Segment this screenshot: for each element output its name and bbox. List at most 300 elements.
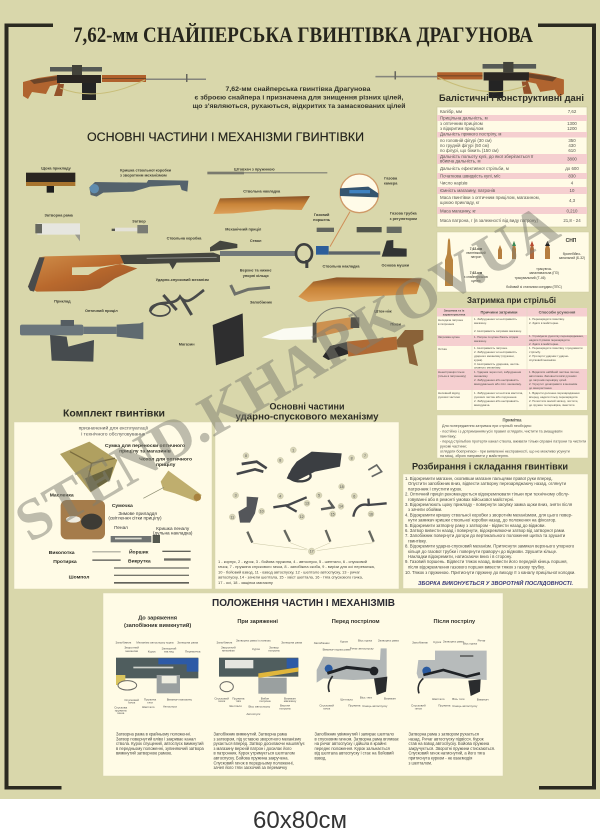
cartridge labels: 7,62-мм <box>470 271 483 275</box>
kit labels: і технічного обслуговування <box>81 431 146 437</box>
delay table text: 2. Усунути і дозаправити в механізм <box>529 382 577 386</box>
diagram labels: гачок <box>415 706 423 710</box>
steps text: говуванні або в ремонті умовах військової майстерні. <box>408 497 514 502</box>
delay table text: 2. Забруднення або несправність <box>474 399 519 403</box>
intro text: 7,62-мм снайперська гвинтівка Драгунова <box>226 85 371 93</box>
kit labels <box>49 424 193 580</box>
rifle illustration: right <box>375 62 564 98</box>
delay table text: 2. Забруднення або несправність <box>474 378 519 382</box>
delay table text: 1. Несправність патрона. <box>474 346 508 350</box>
kit labels: прицілу та магазинів <box>119 448 171 454</box>
part: optical sight <box>20 320 143 362</box>
steps text: 1. Відокремити магазин, охопивши магазин пальцями правої руки вперед. <box>405 476 553 481</box>
diagram labels: Спусковий <box>214 696 229 700</box>
item: pencil case <box>111 535 160 543</box>
table rows: Маса магазину, кг <box>440 208 476 214</box>
description: during loading: рухається вперед. Затвор досилаючи нашляпує <box>214 741 305 746</box>
kit labels: Пенал <box>114 525 128 530</box>
part labels: Ствол <box>250 239 262 243</box>
part numbers: 18 <box>340 485 344 489</box>
cartridge labels: кулею <box>471 279 481 283</box>
diagram labels: гачок <box>323 706 331 710</box>
part: self-timer <box>273 497 307 512</box>
cartridge labels: запалювальна (ПЗ) <box>529 271 559 275</box>
delay table text: автотяжка. Заповнити віскі рухомих <box>529 374 577 378</box>
table rows: по грудній фігурі (50 см) <box>440 143 489 148</box>
cartridge labels: з снайперською <box>464 275 489 279</box>
steps text: 7. Запобіжник повернути догори до вертикального положення щитка та зрушити <box>405 533 566 538</box>
column headings: Перед пострілом <box>332 619 380 625</box>
cartridge labels: трасувальний (Т-46) <box>514 276 546 280</box>
part labels: з регулятором <box>390 217 417 221</box>
cartridge labels: запальний (Б-32) <box>559 256 585 260</box>
kit labels: Викрутка <box>128 559 151 565</box>
diagram labels: Спускова <box>114 706 127 710</box>
delay table text: надати її різким перезарядити. <box>529 338 570 342</box>
heading: main parts: ОСНОВНІ ЧАСТИНИ І МЕХАНІЗМИ ГВИНТІВКИ <box>87 130 364 144</box>
parts legend: автоспуску, 14 - зачепи шептала, 15 - хвіст шептала, 16 - тяга спускового гачка, <box>218 575 363 580</box>
steps text: нути замикач кришки ствольної коробки назад, до положення на фіксатор. <box>408 518 556 523</box>
diagram labels: тяги <box>147 700 153 704</box>
delay table text: 1. Видалити набійний частіше пилом, <box>529 370 580 374</box>
delay table text: магазину. <box>474 339 487 343</box>
part: axles <box>247 530 374 543</box>
diagram labels: Вимикач <box>477 698 489 702</box>
kit labels: прицілу <box>156 462 176 468</box>
part numbers: 16 <box>369 512 373 516</box>
diagram labels: Спусковий <box>124 698 139 702</box>
delay table text: 2. Протерти ударник і ударно- <box>529 354 569 358</box>
kit labels: (світлення сітки прицілу) <box>108 515 162 520</box>
part labels: Піхви <box>390 322 402 326</box>
delay table text: викидувальних або післ. механізму. <box>474 382 522 386</box>
table rows: до 600 <box>565 166 579 171</box>
diagram labels: Затворний <box>162 646 177 650</box>
table rows: Прицільна дальність, м <box>440 116 488 120</box>
part labels: Ствольна накладка <box>323 264 360 268</box>
description: during loading: в патронник. Курок утримується шепталом <box>214 751 295 756</box>
steps text: 10. Тяжок з пружиною. Притиснути пружину до виходу її з каналу прицільної колодки. <box>405 570 575 575</box>
diagram labels: Пружина <box>348 704 361 708</box>
delay table text: 1. Утримуючи рукоятку перезаряджання, <box>529 334 584 338</box>
diagram labels: Запобіжник <box>314 641 330 645</box>
part: hammer <box>238 497 258 523</box>
delay table text <box>438 308 584 407</box>
diagram labels: Верхня <box>280 704 290 708</box>
description: before shot: Запобіжник увімкнутий і запирає шептало <box>314 732 395 736</box>
delay table text: Способи усунення <box>539 310 576 314</box>
part: trigger <box>353 499 387 517</box>
diagram labels: Вісь автоспуску <box>249 704 271 708</box>
steps text: 4. Відокремити кришку ствольної коробки з зворотнім механізмом, для цього повер- <box>405 512 573 517</box>
diagram labels: Затворна рама <box>378 639 399 643</box>
item: pouch <box>60 442 117 492</box>
note text: гвинтівку; <box>440 434 456 438</box>
diagram labels: Пружина <box>232 696 245 700</box>
diagram labels: Курок <box>148 650 156 654</box>
description: before shot: взвод. <box>314 756 326 760</box>
part labels: Основа мушки <box>382 264 410 268</box>
description: before loading: Затворна рама в крайньому положенні. <box>116 732 191 736</box>
panel: firing delay table <box>437 308 587 410</box>
diagram labels: механізм <box>125 649 138 653</box>
part: spring <box>368 465 382 477</box>
table rows: Початкова швидкість кулі, м/с <box>440 174 501 178</box>
delay table text: 2. Забруднення чи несправність <box>474 350 517 354</box>
kit labels: Сумочка <box>112 503 133 509</box>
delay table text: магазину. <box>474 321 487 325</box>
parts legend: 17 - осі, 18 - защіпка магазину <box>218 580 273 585</box>
part labels: Газова <box>384 176 398 180</box>
description: before shot: від шептала автоспуску і стає на бойовий <box>314 751 394 756</box>
part labels: Газовий <box>314 213 330 217</box>
part labels: Ствольна накладка <box>243 190 281 194</box>
diagram labels: Вісь курка <box>463 641 477 645</box>
table rows: Маса гвинтівки з оптичним прицілом, магазином, <box>440 195 540 200</box>
part: lower handguard <box>298 277 422 302</box>
description: after shot: закручується. Зворотні пружини стискаються. <box>408 746 495 751</box>
column headings: До заряження <box>138 615 177 621</box>
steps text: з зачепи обойми. <box>408 507 442 512</box>
steps text: 9. Газовий поршень. Відвести тяжок назад, вивести його передній кінець поршня, <box>405 559 568 564</box>
table rows: Ємність магазину, патронів <box>440 188 496 193</box>
steps text: 8. Відокремити ударно-спусковий механізм. Притиснути замикач верхнього упорного <box>405 544 575 549</box>
table rows <box>440 109 581 223</box>
delay table text: 1. Забруднення чи нестача мастила, <box>474 391 523 395</box>
delay table text: Неповний відхід <box>438 391 460 395</box>
note text: Для попередження затримок при стрільбі необхідно: <box>442 424 532 428</box>
description: before shot: переднє положення. Курок зальнається <box>314 746 390 751</box>
delay table text: рухомих частин або порушення. <box>474 395 517 399</box>
diagram labels: Ричаг <box>478 639 486 643</box>
part labels: Штовхач з пружиною <box>234 167 275 171</box>
kit labels: Йоршик <box>129 547 149 555</box>
part numbers: 5 <box>318 494 320 498</box>
delay table text: до використання. <box>529 386 552 390</box>
delay table text: 1. Патрон із кулею біжить слідом <box>474 335 518 339</box>
description: before shot <box>314 732 399 760</box>
note text: на місці, зброю направити у майстерню. <box>440 454 509 458</box>
column headings: (запобіжник вимкнутий) <box>124 622 191 629</box>
table rows: 610 <box>568 148 576 153</box>
diagram labels: Затвор <box>269 646 279 650</box>
part: scabbard <box>323 330 423 366</box>
diagram labels: патрона <box>279 706 291 710</box>
part labels: Ударно-спусковий механізм <box>156 278 209 282</box>
table rows: по головній фігурі (30 см) <box>440 138 492 143</box>
steps text: 5. Відокремити затворну раму з затвором - відвести назад до відмови. <box>405 523 546 528</box>
steps text: після відокремлення газового поршня вивести тяжок з газову трубку. <box>408 564 545 569</box>
part numbers: 13 <box>305 502 309 506</box>
diagram labels: Вибач <box>261 696 270 700</box>
diagram labels: Запобіжник <box>115 640 132 644</box>
part numbers: 8 <box>245 454 247 458</box>
table rows: 4,3 <box>569 198 576 203</box>
steps text: гвинтівку. <box>408 538 427 543</box>
delay table text: характеристика <box>443 312 466 316</box>
description: after shot: став на взвод автоспуску. Бойова пружина <box>408 741 490 746</box>
parts legend: 10 - бойовий взвод, 11 - взвод автоспуску, 12 - шептало автоспуску, 13 - ричаг <box>218 569 361 574</box>
part: safety bracket <box>237 462 267 474</box>
delay table text: стрільбу. <box>529 350 541 354</box>
delay table text: 2. Почистити малий затвор, чистити, <box>529 399 578 403</box>
delay table text: до патронів перевірку цілей. <box>529 378 567 382</box>
part: magazine <box>213 313 244 365</box>
diagram labels: гачок <box>128 701 136 705</box>
table rows: 1200 <box>567 126 577 131</box>
delay table text: викидувача. <box>474 403 490 407</box>
part: cheek piece <box>26 173 75 193</box>
diagram labels: Автоспуск <box>163 704 178 708</box>
intro text: що з'являються, рухаються, відкритих та замаскованих цілей <box>192 102 406 110</box>
diagram labels: Спусковий <box>319 704 334 708</box>
diagram labels: Шептало <box>229 704 242 708</box>
description: during loading: зачеп його тяги заскочив за перемичку <box>214 765 288 770</box>
part labels: Магазин <box>179 343 195 347</box>
diagram labels: Кінець автоспуску <box>363 704 388 708</box>
diagram labels: Шептало <box>142 705 155 709</box>
delay table text: курка). <box>474 358 483 362</box>
part numbers: 4 <box>279 494 281 498</box>
diagram labels: Вимикач магазину <box>167 697 192 701</box>
heading: positions: ПОЛОЖЕННЯ ЧАСТИН І МЕХАНІЗМІВ <box>212 598 395 609</box>
steps text: 2. Оптичний приціл рекомендується відокремлювати тільки при технічному обслу- <box>405 492 570 497</box>
panel: disassembly steps <box>403 474 588 588</box>
delay table text: сновного механізму. <box>474 366 501 370</box>
delay table text: 1. Вдарити долонею перезаряджання <box>529 391 580 395</box>
parts legend <box>218 559 375 585</box>
part numbers: 17 <box>310 550 314 554</box>
part numbers: 11 <box>230 515 234 519</box>
part: receiver cover <box>89 180 188 197</box>
part numbers <box>229 447 374 555</box>
table rows: Число нарізів <box>440 180 468 186</box>
part numbers: 6 <box>353 494 355 498</box>
note text <box>440 418 586 458</box>
description: before shot: на ричаг автоспуску і дійшла в крайнє <box>314 741 387 746</box>
steps text: Опустити запобіжник вниз, відвести затворну перезаряджаючу назад, оглянути <box>408 481 567 486</box>
table rows: 4 <box>571 180 574 186</box>
part: sear <box>321 500 334 509</box>
part labels: Ствольна коробка <box>167 236 202 240</box>
diagram labels: Курок <box>340 640 349 644</box>
table rows: 1300 <box>567 121 577 126</box>
kit labels: Зимове приладдя <box>118 511 157 516</box>
heading: disassembly: Розбирання і складання гвинтівки <box>412 462 568 472</box>
diagram labels: Вісь тяги <box>452 697 465 701</box>
cartridge labels: 7,62-мм <box>470 247 483 251</box>
table rows: по фігурі, що біжить (150 см) <box>440 148 499 153</box>
table rows: 350 <box>568 138 576 143</box>
steps text <box>405 476 575 575</box>
cartridge types <box>498 241 550 259</box>
part labels: Запобіжник <box>250 301 272 305</box>
intro text <box>192 85 406 110</box>
part: gas piston <box>317 228 334 232</box>
panel: ballistic data table <box>437 107 587 227</box>
diagram: before shot <box>317 648 387 695</box>
kit labels: Шомпол <box>69 574 89 580</box>
part: piston rod <box>207 172 327 174</box>
part numbers: 1 <box>292 448 294 452</box>
delay table text: Осічка <box>438 347 447 351</box>
diagram labels: Вісь тяги <box>360 696 372 700</box>
part numbers: 15 <box>331 512 335 516</box>
delay table text: 2. Здати в майстерню. <box>529 342 559 346</box>
delay table text: 3. Несправність ударника, шепта- <box>474 362 519 366</box>
panel: main parts diagram <box>20 166 423 366</box>
note text: Примітка <box>503 418 522 422</box>
panel: positions of parts and mechanisms <box>103 593 503 776</box>
part numbers: 3 <box>235 494 237 498</box>
title: 7,62-мм СНАЙПЕРСЬКА ГВИНТІВКА ДРАГУНОВА <box>73 22 533 47</box>
table rows: 10 <box>570 188 575 193</box>
table rows: з відкритим прицілом <box>440 126 483 131</box>
table rows: вбивча дальність, м <box>440 158 481 164</box>
part: gas chamber magnifier <box>330 174 379 247</box>
steps text: 6. Затвор вивести назад і повернути, відокремлюючи затвор від затворної рами. <box>405 528 565 533</box>
part: assembled rifle <box>28 240 407 292</box>
delay table text: ударного механізму (пружини, <box>474 354 515 358</box>
description: before loading <box>116 732 204 756</box>
diagram labels: Шептало <box>432 697 445 701</box>
panel: note <box>437 415 588 458</box>
note text: - перед стрільбою протерти канал ствола, вживати тільки справні патрони та чистити <box>440 440 586 444</box>
part labels: Оптичний приціл <box>85 309 118 313</box>
part labels: камера <box>384 182 398 186</box>
description: after shot <box>408 732 495 765</box>
part labels: Газова трубка <box>390 212 418 216</box>
heading: trigger mechanism parts: Основні частини <box>269 402 345 412</box>
diagram labels: гачка <box>117 711 125 715</box>
description: after shot: з шепталом. <box>408 760 432 765</box>
part labels: Приклад <box>54 300 71 304</box>
diagram labels: Запобіжник <box>412 640 429 644</box>
heading: trigger mechanism parts: ударно-спускового механізму <box>236 412 378 422</box>
panel: cartridges <box>437 232 589 292</box>
diagram labels: Пружина <box>144 698 156 702</box>
steps text: 3. Відокремлюють щоку прикладу - повернути засувку замка щоки вниз, зняти після <box>405 502 573 507</box>
part: gas tube <box>357 227 402 233</box>
table rows: щокою прикладу, кг <box>440 200 480 205</box>
part labels: Щока прикладу <box>41 166 72 170</box>
diagram labels: Курок <box>252 647 261 651</box>
diagram labels: Кінець автоспуску <box>453 704 478 708</box>
delay table text: вперед, надати гільзу перезарядити. <box>529 395 578 399</box>
kit labels: Виколотка <box>49 550 75 556</box>
part labels: Затворна рама <box>45 214 74 218</box>
part labels: Верхнє та нижнє <box>240 268 272 272</box>
part numbers: 12 <box>300 515 304 519</box>
diagram labels: Пружина <box>438 704 451 708</box>
kit labels: (дульна накладка) <box>153 531 193 536</box>
note text: рухомі частини; <box>440 444 467 448</box>
panel: trigger mechanism parts <box>215 422 399 589</box>
diagram labels: Затворна рама <box>281 641 302 645</box>
part labels: поршень <box>313 218 331 222</box>
delay table text: Причини затримки <box>480 310 518 314</box>
diagram labels: Затворна рама <box>443 640 464 644</box>
diagram labels: Автоспуск <box>246 712 261 716</box>
description: before loading: в передньому положенні, зупиняючий затвора <box>116 746 204 751</box>
delay table text: 1. Перезарядити гвинтівку. <box>529 317 565 321</box>
part numbers: 8 <box>279 459 281 463</box>
description: during loading: Спусковий гачок в передньому положенні, <box>214 760 294 765</box>
diagram labels: Вимикач <box>384 696 396 700</box>
delay table text: 2. Несправність затримки магазину. <box>474 329 522 333</box>
diagram labels: Зворотний <box>124 646 139 650</box>
cartridge labels: трасуюча- <box>536 267 552 271</box>
description: before loading: вимкнутий затворною рамою. <box>116 751 172 756</box>
diagram: after shot <box>417 651 487 696</box>
steps text: патронник і спустити курок. <box>408 486 462 491</box>
diagram labels: Вимикач <box>284 696 296 700</box>
column headings <box>124 615 476 629</box>
diagram labels: механізм <box>222 649 235 653</box>
rifle illustration: left <box>23 65 206 100</box>
part numbers: 14 <box>339 505 343 509</box>
cartridge labels: бронебійно- <box>563 252 581 256</box>
table rows: Маса патрона, г (в залежності від виду патрону) <box>440 218 538 223</box>
part labels: Механічний приціл <box>225 228 262 232</box>
table rows: 21,8 - 24 <box>563 218 581 223</box>
panel: rifle kit <box>14 422 212 589</box>
heading: firing delays: Затримка при стрільбі <box>467 295 556 305</box>
part: trigger mechanism <box>150 290 204 316</box>
diagram: during loading <box>219 658 298 694</box>
diagram labels <box>114 638 489 716</box>
diagram labels: пружина <box>115 708 127 712</box>
diagram labels: Перемичка <box>185 650 201 654</box>
cartridge labels: патрон <box>471 255 481 259</box>
kit labels: Чохол для оптичного <box>139 457 192 463</box>
column headings: Після пострілу <box>434 619 476 625</box>
heading: kit: Комплект гвинтівки <box>63 408 165 420</box>
delay table text: Затримка кулею <box>438 335 461 339</box>
description: during loading <box>214 732 305 770</box>
table rows: 7,62 <box>568 109 577 114</box>
heading: trigger mechanism parts <box>236 402 378 422</box>
diagram labels: магазину <box>284 699 297 703</box>
diagram labels: Ричаг автоспуску <box>350 646 374 650</box>
part labels: з зворотним механізмом <box>120 173 167 177</box>
large cartridge <box>445 238 453 286</box>
delay table text: 2. Здати в майстерню. <box>529 321 559 325</box>
delay table text: Неподача патрона <box>438 318 463 322</box>
kit labels: Протирка <box>53 559 77 565</box>
diagram labels: Спусковий <box>411 704 426 708</box>
diagram labels: патрона <box>268 649 280 653</box>
diagram labels: Шептало <box>340 697 353 701</box>
table rows: Дальність ефективної стрільби, м <box>440 166 509 171</box>
table rows: Калібр, мм <box>440 109 462 114</box>
delay table text: в патронник <box>438 322 455 326</box>
diagram labels: гачок <box>218 699 226 703</box>
description: before loading: Затвор повернутий вліво і закриває канал <box>116 736 196 741</box>
part labels: Шток-ніж <box>374 310 392 314</box>
cartridge labels: гвинтівковий <box>466 251 486 255</box>
part: housing <box>287 452 342 482</box>
diagram labels: тяги <box>235 699 242 703</box>
item: oil bottle case <box>61 500 105 539</box>
description: after shot: Затворна рама з затвором рухається <box>408 732 479 736</box>
steps text: Накладки відокремити, натискаючи вниз і в сторону. <box>408 554 512 559</box>
diagram labels: Вимикач курка рами <box>323 648 351 652</box>
intro text: є зброєю снайпера і призначена для знищення різних цілей, <box>194 94 404 102</box>
diagram labels: Вісь курка <box>358 638 372 642</box>
delay table text: 1. Забруднення чи несправність <box>474 317 517 321</box>
description: after shot: притиснута курком - не взаємодія <box>408 756 472 760</box>
